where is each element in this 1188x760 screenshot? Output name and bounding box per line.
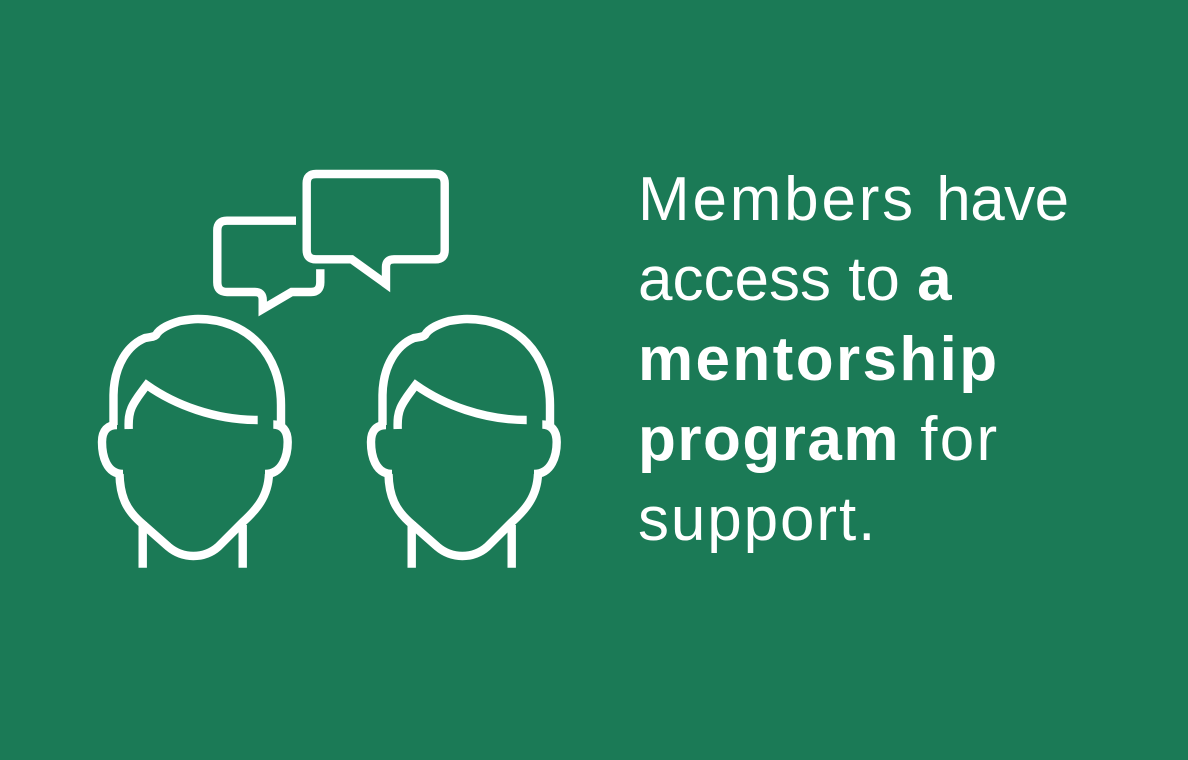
icon: two people talking — [98, 170, 561, 568]
text block: mentorship message — [638, 165, 1069, 554]
icon: right speech bubble — [307, 174, 445, 284]
icon: left speech bubble — [217, 221, 320, 309]
icon: left head — [102, 319, 288, 568]
text block: mentorship message: program for — [638, 405, 999, 474]
text block: mentorship message: mentorship — [638, 325, 1000, 394]
text block: mentorship message: support. — [638, 485, 877, 554]
text block: mentorship message: access to a — [638, 245, 952, 314]
icon: right head — [371, 319, 557, 568]
text block: mentorship message: Members have — [638, 165, 1069, 234]
